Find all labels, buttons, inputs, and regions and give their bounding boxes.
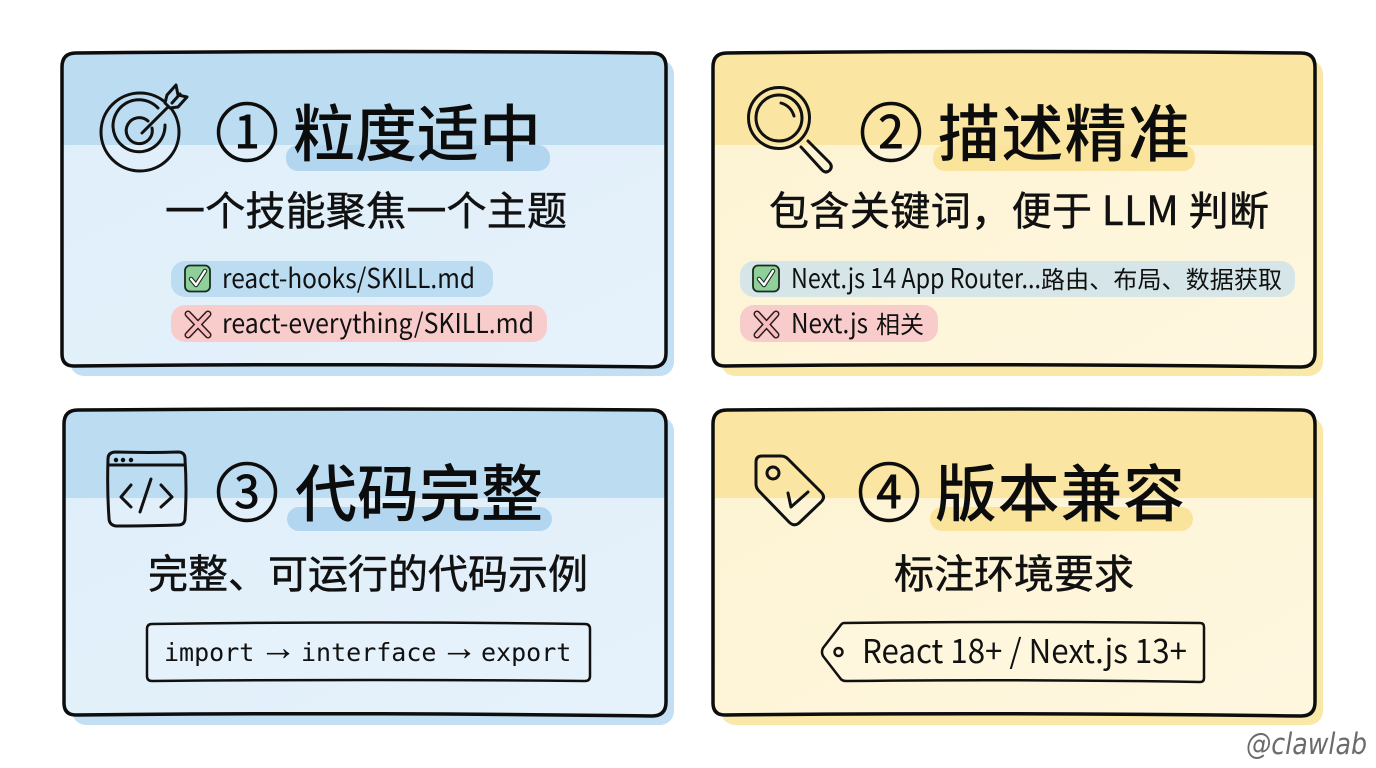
icon: code window bbox=[108, 452, 186, 526]
title highlight bbox=[930, 507, 1193, 531]
number badge 2: 2 bbox=[879, 96, 903, 161]
heading: complete code: 代码完整 bbox=[295, 444, 543, 534]
number badge 3: 3 bbox=[235, 456, 259, 521]
icon: magnifying glass bbox=[748, 88, 831, 172]
good example pill: react-hooks/SKILL.md bbox=[222, 257, 475, 296]
code flow box: interface bbox=[301, 638, 436, 667]
icon: target with arrow bbox=[101, 85, 187, 171]
bad example pill: react-everything/SKILL.md bbox=[222, 302, 534, 341]
code flow box bbox=[147, 622, 590, 681]
title highlight bbox=[287, 507, 552, 531]
number badge 4: 4 bbox=[877, 456, 901, 521]
number badge 3 bbox=[218, 456, 276, 521]
subtitle: 一个技能聚焦一个主题 bbox=[165, 179, 567, 237]
panel: complete code bbox=[60, 405, 674, 725]
number badge 4 bbox=[860, 456, 918, 521]
good example pill bbox=[740, 257, 1295, 297]
good example pill: 路由、布局、数据获取 bbox=[1041, 260, 1282, 295]
bad example pill: Next.js bbox=[791, 302, 868, 341]
title highlight bbox=[286, 145, 550, 171]
good example pill: Next.js 14 App Router... bbox=[791, 257, 1041, 296]
subtitle: 完整、可运行的代码示例 bbox=[148, 542, 588, 600]
panel: version compatibility bbox=[710, 405, 1323, 725]
code flow box: export bbox=[481, 638, 571, 667]
version tag label: React 18+ / Next.js 13+ bbox=[862, 625, 1187, 673]
number badge 1 bbox=[218, 96, 276, 161]
bad example pill bbox=[740, 302, 938, 342]
heading: granularity: 粒度适中 bbox=[293, 84, 541, 174]
panel: accurate description bbox=[710, 50, 1323, 376]
code flow box: → bbox=[259, 627, 297, 669]
subtitle: 包含关键词，便于 LLM 判断 bbox=[769, 179, 1269, 237]
code flow box: → bbox=[440, 627, 478, 669]
subtitle: 标注环境要求 bbox=[894, 542, 1134, 600]
number badge 2 bbox=[862, 96, 920, 161]
bad example pill: 相关 bbox=[876, 305, 924, 340]
code flow box: import bbox=[164, 638, 254, 667]
heading: version compatibility: 版本兼容 bbox=[935, 444, 1185, 534]
number badge 1: 1 bbox=[235, 96, 259, 161]
heading: accurate description: 描述精准 bbox=[938, 84, 1190, 174]
title highlight bbox=[933, 145, 1195, 171]
icon: version tag bbox=[756, 456, 824, 525]
panel: granularity bbox=[60, 50, 674, 376]
